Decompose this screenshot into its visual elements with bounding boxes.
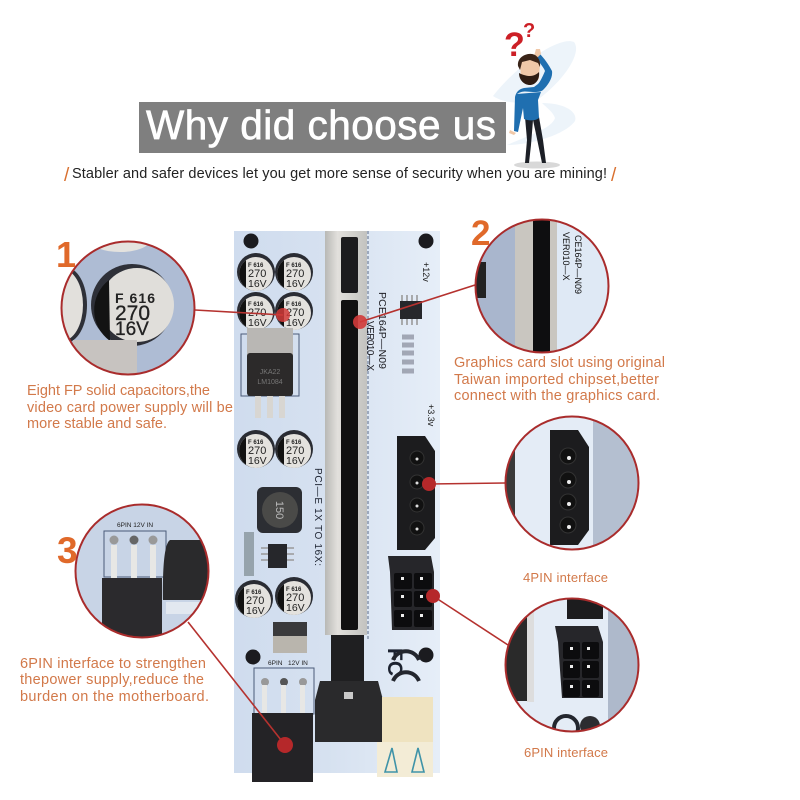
magnifier 4: 4pin close-up (505, 416, 639, 550)
chips and board markings: PCI—E 1X TO 16X: (312, 468, 323, 566)
capacitors (235, 253, 313, 618)
title banner: Why did choose us (146, 102, 496, 148)
magnifier 2: slot close-up: CE164P—N09 (573, 235, 583, 294)
number 2: 2 (471, 214, 490, 253)
6pin power connector (388, 556, 434, 630)
capacitors: 270 (248, 268, 266, 280)
text: capacitors: more stable and safe. (27, 416, 167, 432)
chips and board markings: 6PIN (268, 660, 283, 667)
capacitors: F 616 (286, 263, 302, 269)
capacitors: 270 (286, 445, 304, 457)
capacitors: 270 (286, 268, 304, 280)
text: graphics card slot: connect with the graphics card. (454, 388, 660, 404)
center latch connector (315, 635, 383, 742)
chips and board markings (244, 262, 436, 681)
text: graphics card slot: Graphics card slot using original (454, 355, 665, 371)
callout lines with dots (188, 285, 508, 753)
label: 6PIN interface: 6PIN interface (524, 745, 608, 760)
text: 6pin description: 6PIN interface to strengthen (20, 656, 206, 672)
text: capacitors: Eight FP solid capacitors,the (27, 383, 210, 399)
chips and board markings: +3.3v (426, 404, 436, 427)
capacitors: F 616 (286, 587, 302, 593)
capacitors: 270 (248, 445, 266, 457)
capacitors: 16V (286, 602, 305, 614)
number 3: 3 (57, 530, 78, 571)
chips and board markings: +12v (421, 262, 431, 282)
capacitors: 16V (246, 605, 265, 617)
subtitle: / (611, 165, 617, 186)
voltage regulator: JKA22 (260, 369, 280, 376)
text: graphics card slot (454, 355, 665, 404)
capacitors: 16V (248, 278, 267, 290)
capacitors: 16V (248, 317, 267, 329)
capacitors: F 616 (248, 263, 264, 269)
icon: question marks: ? (504, 26, 525, 64)
capacitors: 16V (286, 278, 305, 290)
text: 6pin description: burden on the motherboard. (20, 689, 209, 705)
magnifier 1: capacitor close-up: 16V (115, 319, 149, 340)
capacitors: 16V (286, 455, 305, 467)
magnifier 2: slot close-up: VER010—X (561, 232, 571, 281)
capacitors: 270 (286, 307, 304, 319)
magnifier 5: 6pin close-up (505, 598, 639, 740)
chips and board markings: VER010—X (364, 321, 375, 371)
capacitors: 270 (248, 307, 266, 319)
voltage regulator (241, 328, 299, 418)
capacitors: F 616 (248, 440, 264, 446)
capacitors: F 616 (286, 302, 302, 308)
magnifier 2: slot close-up (474, 218, 610, 354)
icon: question marks: ? (523, 20, 535, 42)
capacitors: F 616 (246, 590, 262, 596)
capacitors: 270 (246, 595, 264, 607)
text: capacitors (27, 383, 233, 432)
USB port (377, 697, 433, 777)
magnifier 1: capacitor close-up: 270 (115, 302, 150, 325)
illustration: confused man with question marks (493, 20, 576, 168)
text: 6pin description (20, 656, 209, 705)
capacitors: 16V (286, 317, 305, 329)
label: 4PIN interface: 4PIN interface (523, 570, 608, 585)
inductor: 150 (273, 501, 285, 519)
capacitors: F 616 (286, 440, 302, 446)
magnifier 3: bottom connector close-up (76, 504, 208, 638)
graphics card slot (325, 231, 368, 640)
text: capacitors: video card power supply will be (27, 400, 233, 416)
magnifier 3: bottom connector close-up: 6PIN 12V IN (117, 522, 153, 529)
number 1: 1 (56, 234, 76, 275)
chips and board markings: PCE164P—N09 (376, 292, 388, 369)
bottom 6pin 12V connector (252, 668, 314, 782)
voltage regulator: LM1084 (257, 379, 283, 386)
subtitle: / (64, 165, 70, 186)
capacitors: 16V (248, 455, 267, 467)
text: 6pin description: thepower supply,reduce the (20, 672, 204, 688)
capacitors: F 616 (248, 302, 264, 308)
icon: question marks (504, 20, 535, 64)
4pin power connector (397, 436, 435, 550)
capacitors: 270 (286, 592, 304, 604)
chips and board markings: FC (383, 648, 406, 676)
text: graphics card slot: Taiwan imported chipset,better (454, 372, 659, 388)
subtitle: Stabler and safer devices let you get more sense of security when you are mining! (72, 166, 607, 182)
magnifier 1: capacitor close-up: F 616 (115, 290, 155, 306)
inductor (257, 487, 302, 533)
circuit board: PCI-E riser (234, 231, 440, 782)
magnifier 1: capacitor close-up (60, 240, 196, 376)
chips and board markings: 12V IN (288, 660, 308, 667)
